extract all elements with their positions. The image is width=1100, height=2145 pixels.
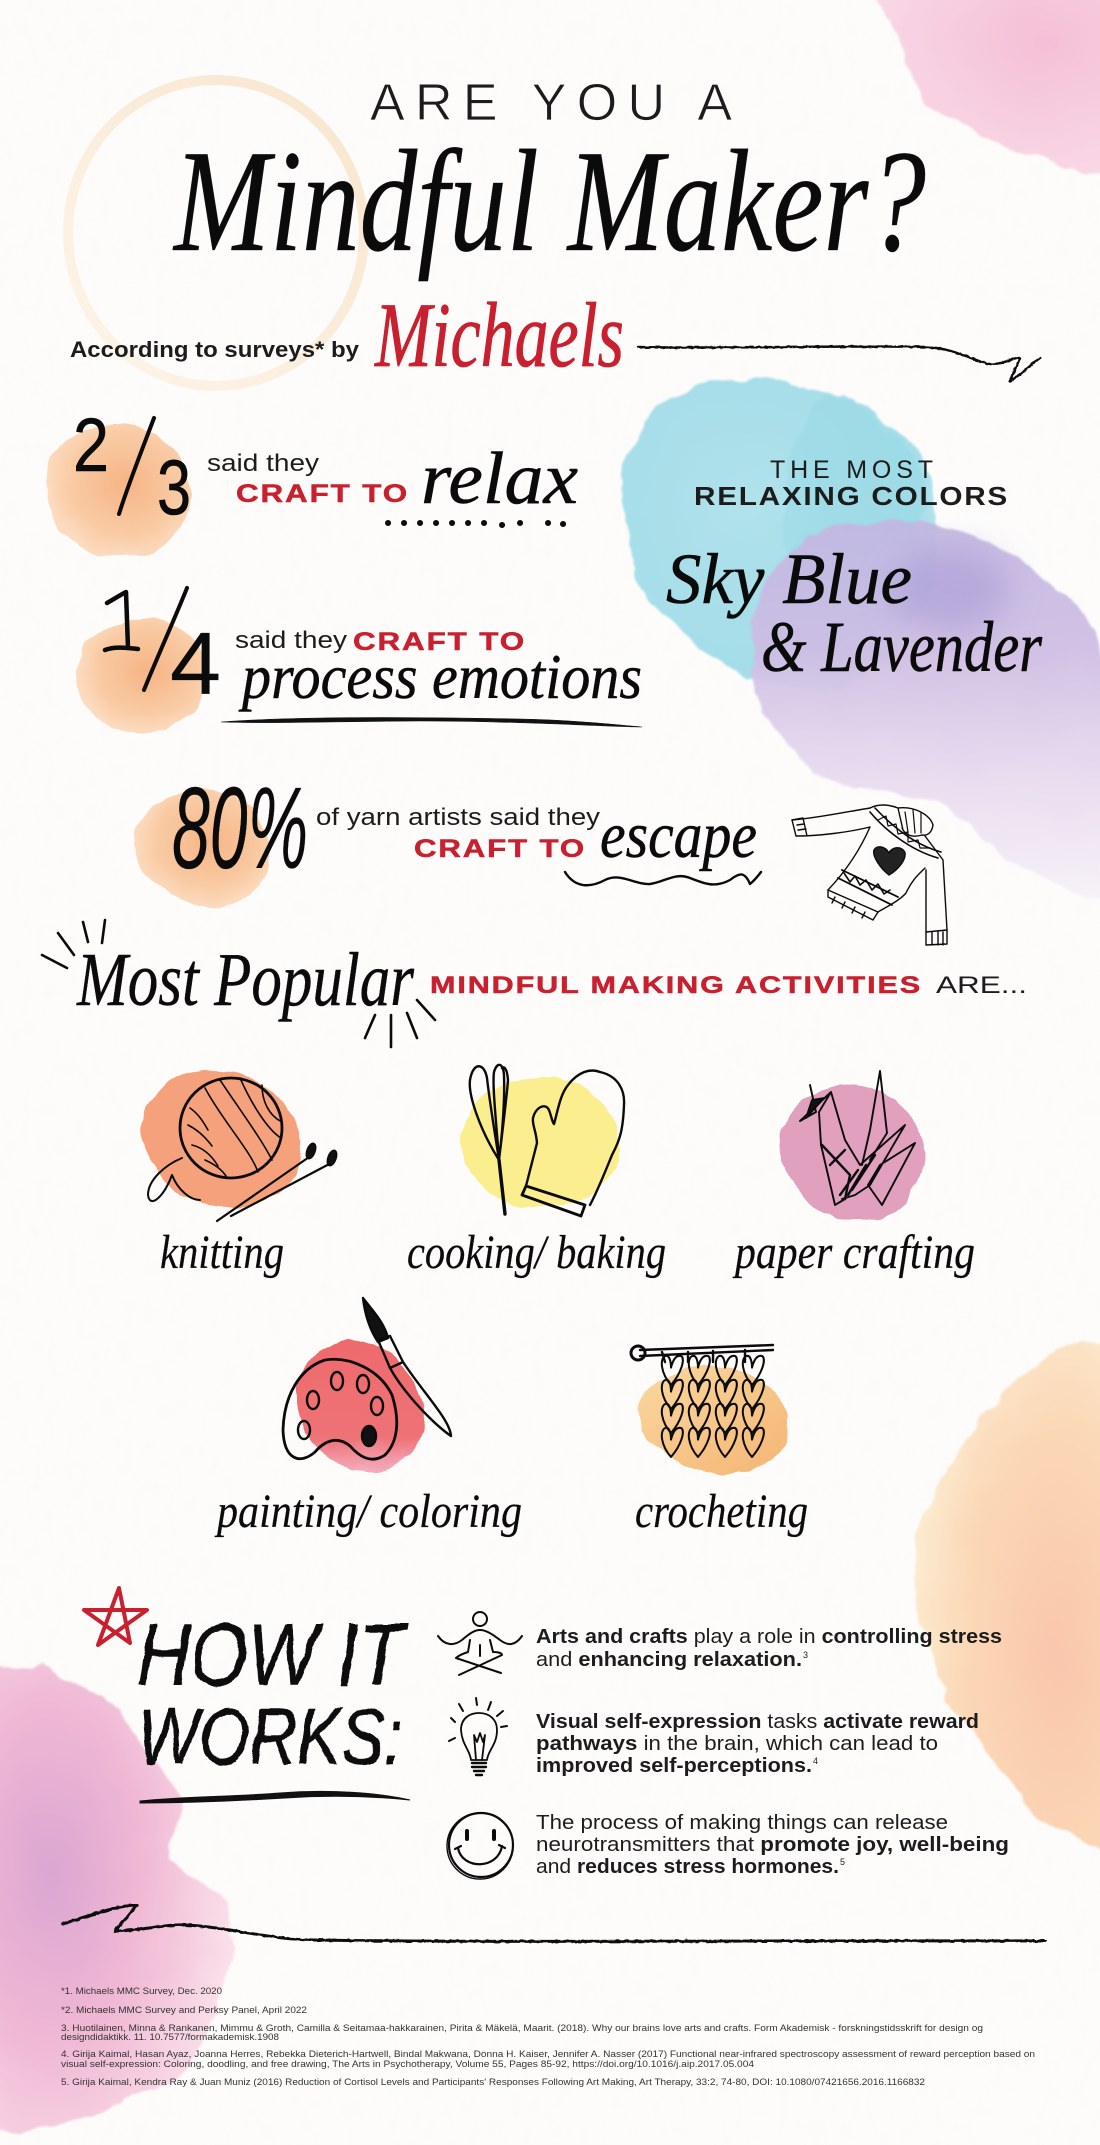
- watercolor dab: [46, 424, 190, 557]
- squiggle line: [638, 346, 1040, 381]
- watercolor dab: [76, 619, 207, 733]
- watercolor: coffee ring: [68, 80, 364, 386]
- how it works item: meditation: [438, 1612, 1002, 1675]
- how it works heading: [84, 1588, 410, 1803]
- watercolor dab: [638, 1364, 790, 1474]
- fraction 1/4: 4: [170, 614, 221, 713]
- text: 4: [813, 1756, 818, 1766]
- brush underline: [140, 1791, 410, 1803]
- fraction 1/4: [105, 588, 221, 713]
- burst top left: [42, 920, 105, 968]
- relaxing colors callout: [666, 456, 1043, 687]
- icon: origami crane: [800, 1071, 915, 1205]
- footnotes: *2. Michaels MMC Survey and Perksy Panel, April 2022: [61, 2005, 307, 2015]
- text: neurotransmitters that promote joy, well-being: [536, 1833, 1009, 1856]
- fraction 2/3: 2: [73, 403, 109, 488]
- relaxing colors callout: Sky Blue: [666, 539, 912, 619]
- stat: 2/3 craft to relax: [46, 403, 578, 557]
- label: crocheting: [635, 1485, 808, 1538]
- section heading: most popular: Most Popular: [76, 938, 414, 1022]
- text: Arts and crafts play a role in controlling stress: [536, 1625, 1002, 1648]
- footnotes: 3. Huotilainen, Minna & Rankanen, Mimmu & Groth, Camilla & Seitamaa-hakkarainen, Pirita & Mäkelä, Maarit. (2018). Why our brains love arts and crafts. Form Akademisk - forskningstidsskrift for design og: [61, 2023, 983, 2033]
- footnotes: 5. Girija Kaimal, Kendra Ray & Juan Muniz (2016) Reduction of Cortisol Levels and Participants' Responses Following Art Making, Art Therapy, 33:2, 74-80, DOI: 10.1080/07421656.2016.1166832: [61, 2077, 925, 2087]
- Michaels logo: Michaels: [374, 284, 624, 386]
- footnotes: 4. Girija Kaimal, Hasan Ayaz, Joanna Herres, Rebekka Dieterich-Hartwell, Bindal Makwana, Donna H. Kaiser, Jennifer A. Nasser (2017) Functional near-infrared spectroscopy assessment of reward perception based on: [61, 2049, 1035, 2059]
- watercolor: sky blue blob: [622, 380, 938, 691]
- activity: painting / coloring: [214, 1298, 522, 1538]
- stat text: said they: [235, 627, 347, 654]
- fraction 2/3: [73, 403, 191, 531]
- footnotes: [61, 1986, 1035, 2087]
- text: and enhancing relaxation.: [536, 1648, 802, 1671]
- text: [536, 1811, 1009, 1878]
- stat: 2/3 craft to relax: CRAFT TO: [236, 480, 409, 508]
- footnotes: *1. Michaels MMC Survey, Dec. 2020: [61, 1986, 222, 1996]
- wavy underline: [565, 872, 761, 885]
- dotted underline: [388, 523, 563, 525]
- title line two: Mindful Maker?: [172, 120, 926, 282]
- icon: sweater: [792, 805, 947, 945]
- how it works item: reward: [449, 1698, 979, 1777]
- how it works heading: HOW IT: [137, 1605, 407, 1704]
- section heading: most popular: [42, 920, 1027, 1047]
- how it works item: joy: [447, 1811, 1009, 1879]
- text: pathways in the brain, which can lead to: [536, 1732, 938, 1755]
- watercolor dab: [296, 1338, 426, 1472]
- text: 3: [803, 1650, 808, 1660]
- footnotes: designdidaktikk. 11. 10.7577/formakademisk.1908: [61, 2032, 279, 2042]
- brush underline: [221, 717, 642, 727]
- text: [536, 1625, 1002, 1671]
- text: Visual self-expression tasks activate reward: [536, 1710, 979, 1733]
- relaxing colors callout: RELAXING COLORS: [694, 481, 1009, 511]
- watercolor: lavender dark core: [890, 548, 1010, 632]
- text: improved self-perceptions.: [536, 1754, 812, 1777]
- survey attribution: According to surveys* by: [70, 337, 360, 362]
- watercolor dab: [461, 1076, 620, 1207]
- watercolor: lavender blob: [751, 521, 1100, 900]
- text: [536, 1710, 979, 1777]
- burst bottom right: [365, 1000, 435, 1047]
- label: knitting: [160, 1226, 284, 1279]
- activity: crocheting: [631, 1345, 808, 1538]
- activity: knitting: [141, 1069, 338, 1279]
- label: paper crafting: [732, 1226, 975, 1279]
- how it works heading: WORKS:: [137, 1692, 403, 1781]
- label: cooking/ baking: [407, 1226, 666, 1279]
- watercolor dab: [141, 1069, 302, 1208]
- stat: 1/4 process emotions: [76, 588, 642, 733]
- heading: [172, 74, 926, 282]
- label: painting/ coloring: [214, 1485, 522, 1538]
- icon: yarn ball and needles: [148, 1078, 338, 1221]
- activity: paper crafting: [732, 1071, 975, 1279]
- relaxing colors callout: & Lavender: [761, 607, 1043, 687]
- icon: whisk and oven mitt: [470, 1065, 624, 1216]
- stat: 2/3 craft to relax: relax: [421, 438, 578, 520]
- stat text: said they: [207, 450, 319, 477]
- stat text: of yarn artists said they: [316, 804, 600, 831]
- icon: palette and brush: [283, 1298, 451, 1459]
- bottom squiggle divider: [63, 1905, 1045, 1941]
- stat: 80% craft to escape: [134, 763, 761, 906]
- icon: red star: [84, 1588, 147, 1645]
- watercolor: bottom left pink: [0, 1662, 235, 2132]
- activity: cooking / baking: [407, 1065, 666, 1279]
- survey attribution: [70, 284, 1040, 386]
- icon: light bulb: [449, 1698, 507, 1775]
- watercolor dab: [134, 789, 270, 906]
- section heading: most popular: ARE...: [936, 972, 1027, 999]
- icon: crochet stitches: [631, 1345, 773, 1457]
- section heading: most popular: MINDFUL MAKING ACTIVITIES: [430, 972, 922, 999]
- title line one: ARE YOU A: [370, 74, 732, 132]
- stat: 80% craft to escape: CRAFT TO: [414, 835, 586, 863]
- fraction 2/3: 3: [157, 443, 191, 531]
- icon: meditating figure: [438, 1612, 522, 1675]
- stat: 1/4 process emotions: process emotions: [238, 641, 642, 712]
- text: The process of making things can release: [536, 1811, 948, 1834]
- watercolor: right orange: [912, 1345, 1100, 1862]
- icon: smiley: [447, 1813, 513, 1879]
- percentage: 80%: [172, 763, 308, 893]
- stat: 1/4 process emotions: CRAFT TO: [353, 628, 526, 656]
- watercolor: top right pink: [873, 0, 1100, 180]
- relaxing colors callout: THE MOST: [770, 456, 933, 484]
- footnotes: visual self-expression: Coloring, doodling, and free drawing, The Arts in Psychotherapy, Volume 55, Pages 85-92, https://doi.org/10.1016/j.aip.2017.05.004: [61, 2059, 754, 2069]
- text: 5: [840, 1857, 845, 1867]
- stat: 80% craft to escape: escape: [600, 799, 757, 872]
- text: and reduces stress hormones.: [536, 1855, 839, 1878]
- watercolor dab: [778, 1085, 925, 1220]
